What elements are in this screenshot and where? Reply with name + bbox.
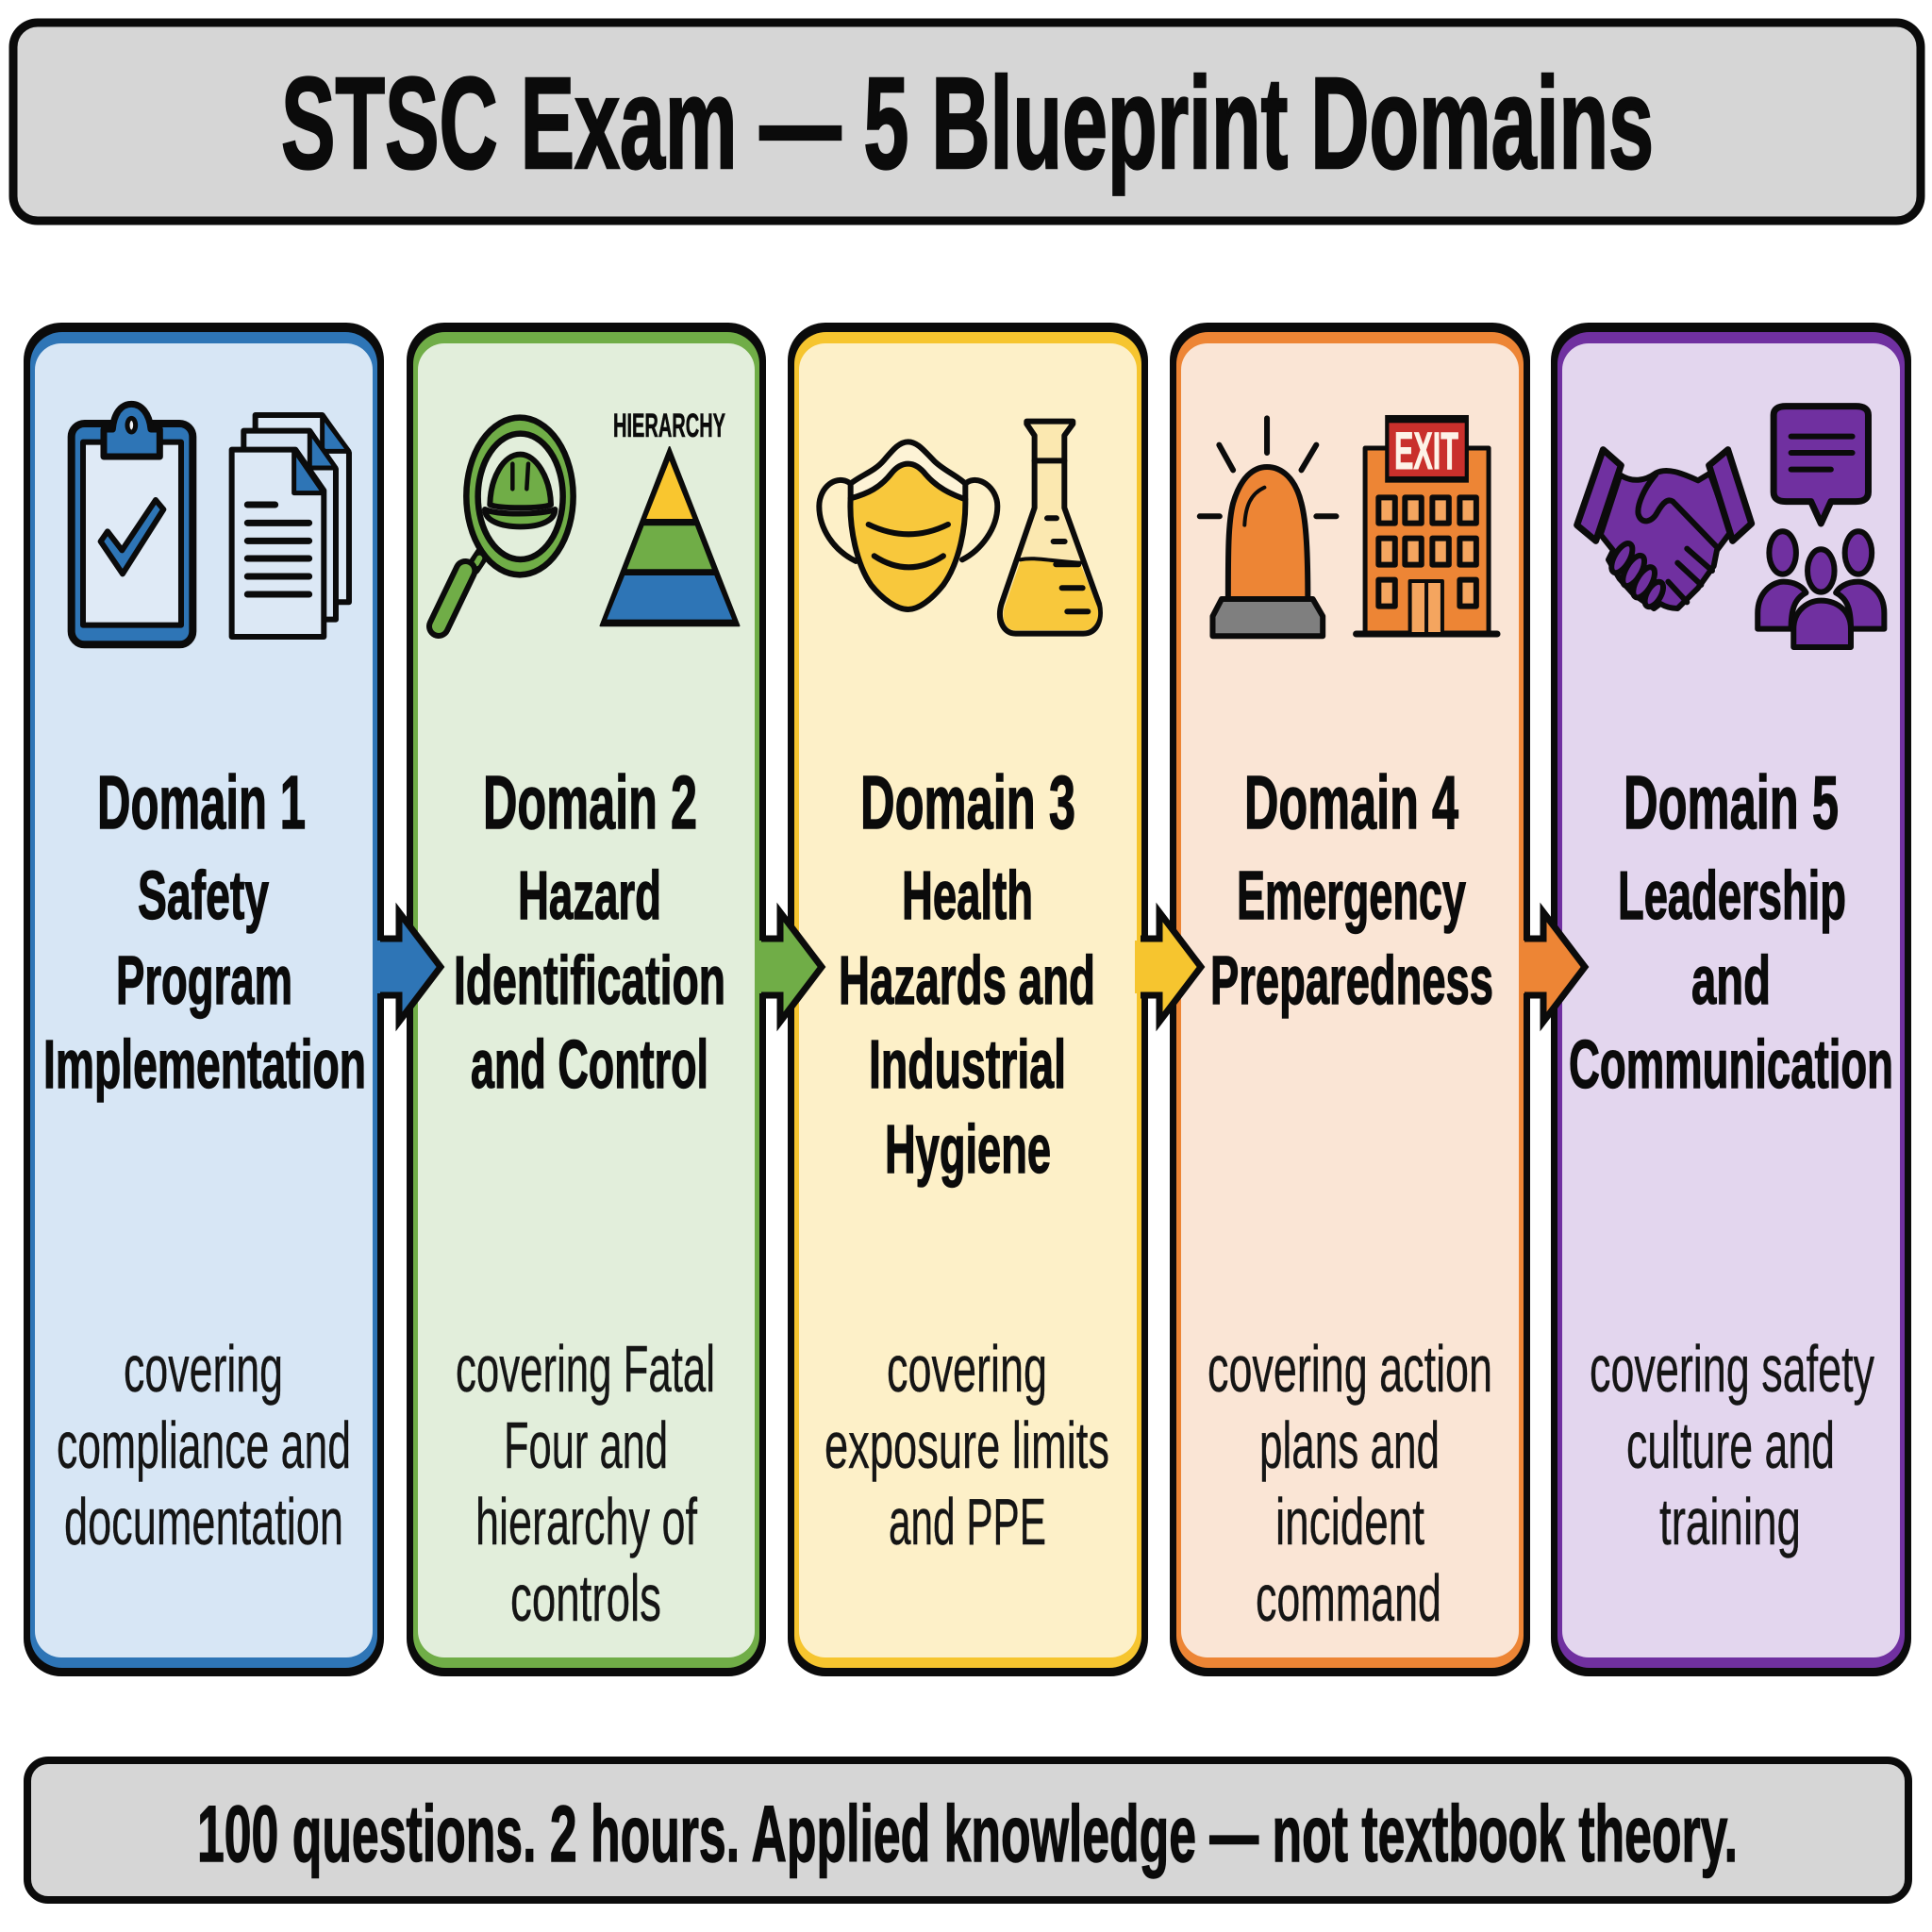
heading: domain 2: and Control: [471, 1027, 708, 1103]
text: domain 3 description: covering: [887, 1332, 1047, 1406]
icon: stacked documents: [232, 415, 349, 637]
text: domain 2 description: hierarchy of: [475, 1485, 697, 1558]
icon: respirator mask: [819, 441, 997, 609]
icon: hierarchy pyramid: HIERARCHY: [613, 408, 725, 444]
heading: domain 1: Program: [116, 943, 292, 1019]
arrow: domain 1 to 2: [375, 912, 442, 1022]
icon: magnifier with hard hat: [439, 418, 574, 626]
icon: handshake: [1577, 450, 1752, 609]
heading: domain 3: Hygiene: [885, 1112, 1051, 1188]
text: domain 2 description: covering Fatal: [456, 1332, 715, 1406]
panel: domain 4: [1170, 323, 1530, 1676]
heading: domain 3: Industrial: [869, 1027, 1066, 1103]
text: domain 5 description: training: [1659, 1485, 1801, 1558]
heading: domain 3: Health: [902, 858, 1033, 934]
text: domain 4 description: [1208, 1332, 1492, 1635]
text: domain 1 description: compliance and: [57, 1408, 351, 1482]
panel: domain 2: [407, 323, 766, 1676]
icon: emergency beacon: [1200, 418, 1336, 636]
text: domain 1 description: covering: [124, 1332, 283, 1406]
text: domain 1 description: documentation: [64, 1485, 343, 1558]
panel: domain 3: [788, 323, 1148, 1676]
heading: domain 2: Hazard: [518, 858, 661, 934]
text: domain 2 description: Four and: [504, 1408, 668, 1482]
heading: domain 1: Domain 1: [97, 760, 306, 844]
arrow: domain 2 to 3: [756, 912, 824, 1022]
text: domain 3 description: [824, 1332, 1109, 1558]
text: domain 5 description: [1590, 1332, 1874, 1558]
icon: speech bubble: [1774, 407, 1868, 524]
title banner: [13, 23, 1921, 221]
footer banner: [27, 1760, 1908, 1900]
heading: domain 2: Domain 2: [483, 760, 697, 844]
text: domain 2 description: controls: [510, 1561, 661, 1635]
heading: domain 1: Implementation: [43, 1027, 366, 1103]
text: domain 4 description: incident: [1275, 1485, 1424, 1558]
text: domain 4 description: plans and: [1259, 1408, 1440, 1482]
panel: domain 1: [24, 323, 384, 1676]
icon: building with exit sign: EXIT: [1394, 421, 1458, 480]
heading: domain 4: Domain 4: [1244, 760, 1458, 844]
heading: domain 3: Hazards and: [839, 943, 1095, 1019]
icon: group of people: [1757, 531, 1884, 647]
icon: clipboard with check: [72, 404, 192, 644]
text: domain 2 description: [456, 1332, 715, 1635]
heading: domain 1: [43, 760, 366, 1103]
icon: building with exit sign: [1357, 415, 1497, 634]
text: domain 4 description: covering action: [1208, 1332, 1492, 1406]
text: domain 4 description: command: [1256, 1561, 1441, 1635]
heading: domain 4: Emergency: [1237, 858, 1466, 934]
text: domain 3 description: exposure limits: [824, 1408, 1109, 1482]
arrow: domain 3 to 4: [1135, 912, 1203, 1022]
heading: domain 2: Identification: [454, 943, 725, 1019]
heading: domain 5: and: [1691, 943, 1771, 1019]
text: domain 3 description: and PPE: [889, 1485, 1046, 1558]
heading: domain 4: [1210, 760, 1493, 1019]
icon: hierarchy pyramid: [600, 408, 739, 625]
heading: domain 3: Domain 3: [860, 760, 1075, 844]
heading: domain 3: [839, 760, 1095, 1188]
heading: domain 5: [1569, 760, 1893, 1103]
panel: domain 5: [1551, 323, 1911, 1676]
text: domain 1 description: [57, 1332, 351, 1558]
arrow: domain 4 to 5: [1519, 912, 1587, 1022]
icon: chemistry flask: [1000, 422, 1100, 634]
heading: domain 4: Preparedness: [1210, 943, 1493, 1019]
heading: domain 2: [454, 760, 725, 1103]
heading: domain 1: Safety: [138, 858, 269, 934]
